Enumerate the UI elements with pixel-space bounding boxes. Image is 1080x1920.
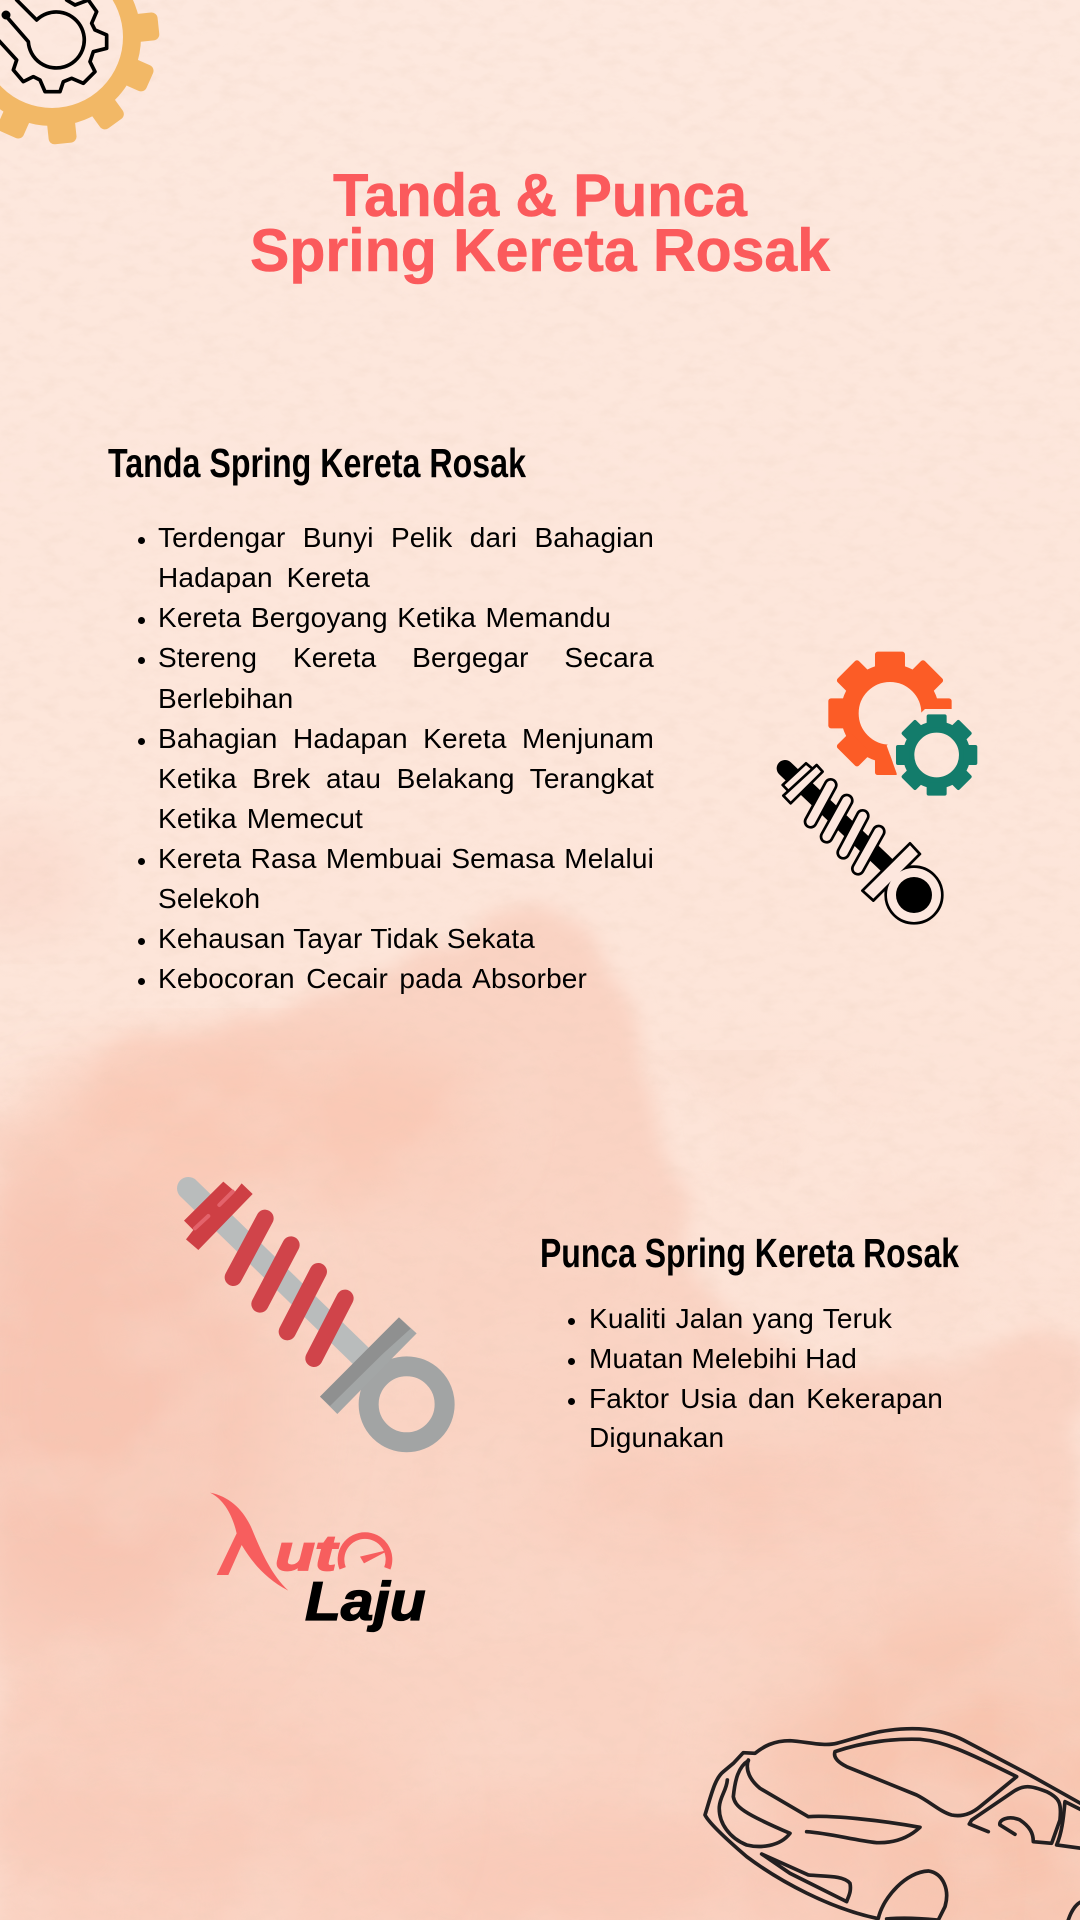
title — [250, 162, 831, 284]
list item: Bahagian Hadapan — [138, 723, 654, 834]
list item: Stereng Kereta: Stereng Kereta Bergegar Secara — [158, 642, 654, 673]
list item: Stereng Kereta: Berlebihan — [158, 683, 293, 714]
list item: Kehausan Tayar: Kehausan Tayar Tidak Sekata — [158, 923, 535, 954]
illustration: car outline — [705, 1729, 1080, 1920]
list item: Kereta Bergoyang: Kereta Bergoyang Ketika Memandu — [158, 602, 611, 633]
list item: Faktor Usia: Faktor Usia dan Kekerapan — [589, 1383, 943, 1414]
list item: Kereta Rasa Membuai: Selekoh — [158, 883, 260, 914]
list item: Muatan Melebihi Had: Muatan Melebihi Had — [589, 1343, 857, 1374]
text block: Tanda list — [138, 522, 654, 994]
list item: Faktor Usia — [568, 1383, 943, 1453]
heading: Tanda Spring Kereta Rosak: Tanda Spring Kereta Rosak — [108, 440, 526, 486]
list item: Bahagian Hadapan: Ketika Memecut — [158, 803, 363, 834]
logo: Auto Laju — [210, 1493, 426, 1632]
list item: Terdengar Bunyi Pelik: Terdengar Bunyi Pelik dari Bahagian — [158, 522, 654, 553]
logo: Auto Laju: ut — [275, 1525, 340, 1581]
icon: corner gear — [0, 0, 160, 145]
list item: Terdengar Bunyi Pelik: Hadapan Kereta — [158, 562, 370, 593]
title: Spring Kereta Rosak — [250, 217, 831, 284]
list item: Faktor Usia: Digunakan — [589, 1422, 724, 1453]
text block: Punca list — [568, 1303, 943, 1453]
list item: Bahagian Hadapan: Bahagian Hadapan Kereta Menjunam — [158, 723, 654, 754]
title: Tanda & Punca — [333, 162, 748, 229]
list item: Kebocoran Cecair: Kebocoran Cecair pada Absorber — [158, 963, 587, 994]
list item: Kualiti Jalan: Kualiti Jalan yang Teruk — [589, 1303, 892, 1334]
list item: Stereng Kereta — [138, 642, 654, 714]
logo: Auto Laju: Laju — [305, 1570, 426, 1632]
list item: Terdengar Bunyi Pelik — [138, 522, 654, 593]
list item: Bahagian Hadapan: Ketika Brek atau Belakang Terangkat — [158, 763, 654, 794]
icon: orange and teal gears — [828, 652, 977, 796]
icon: red and grey shock absorber — [184, 1182, 445, 1442]
list item: Kereta Rasa Membuai — [138, 843, 654, 914]
icon: black outline shock absorber — [783, 763, 942, 923]
heading: Punca Spring Kereta Rosak: Punca Spring Kereta Rosak — [540, 1230, 959, 1276]
list item: Kereta Rasa Membuai: Kereta Rasa Membuai Semasa Melalui — [158, 843, 654, 874]
